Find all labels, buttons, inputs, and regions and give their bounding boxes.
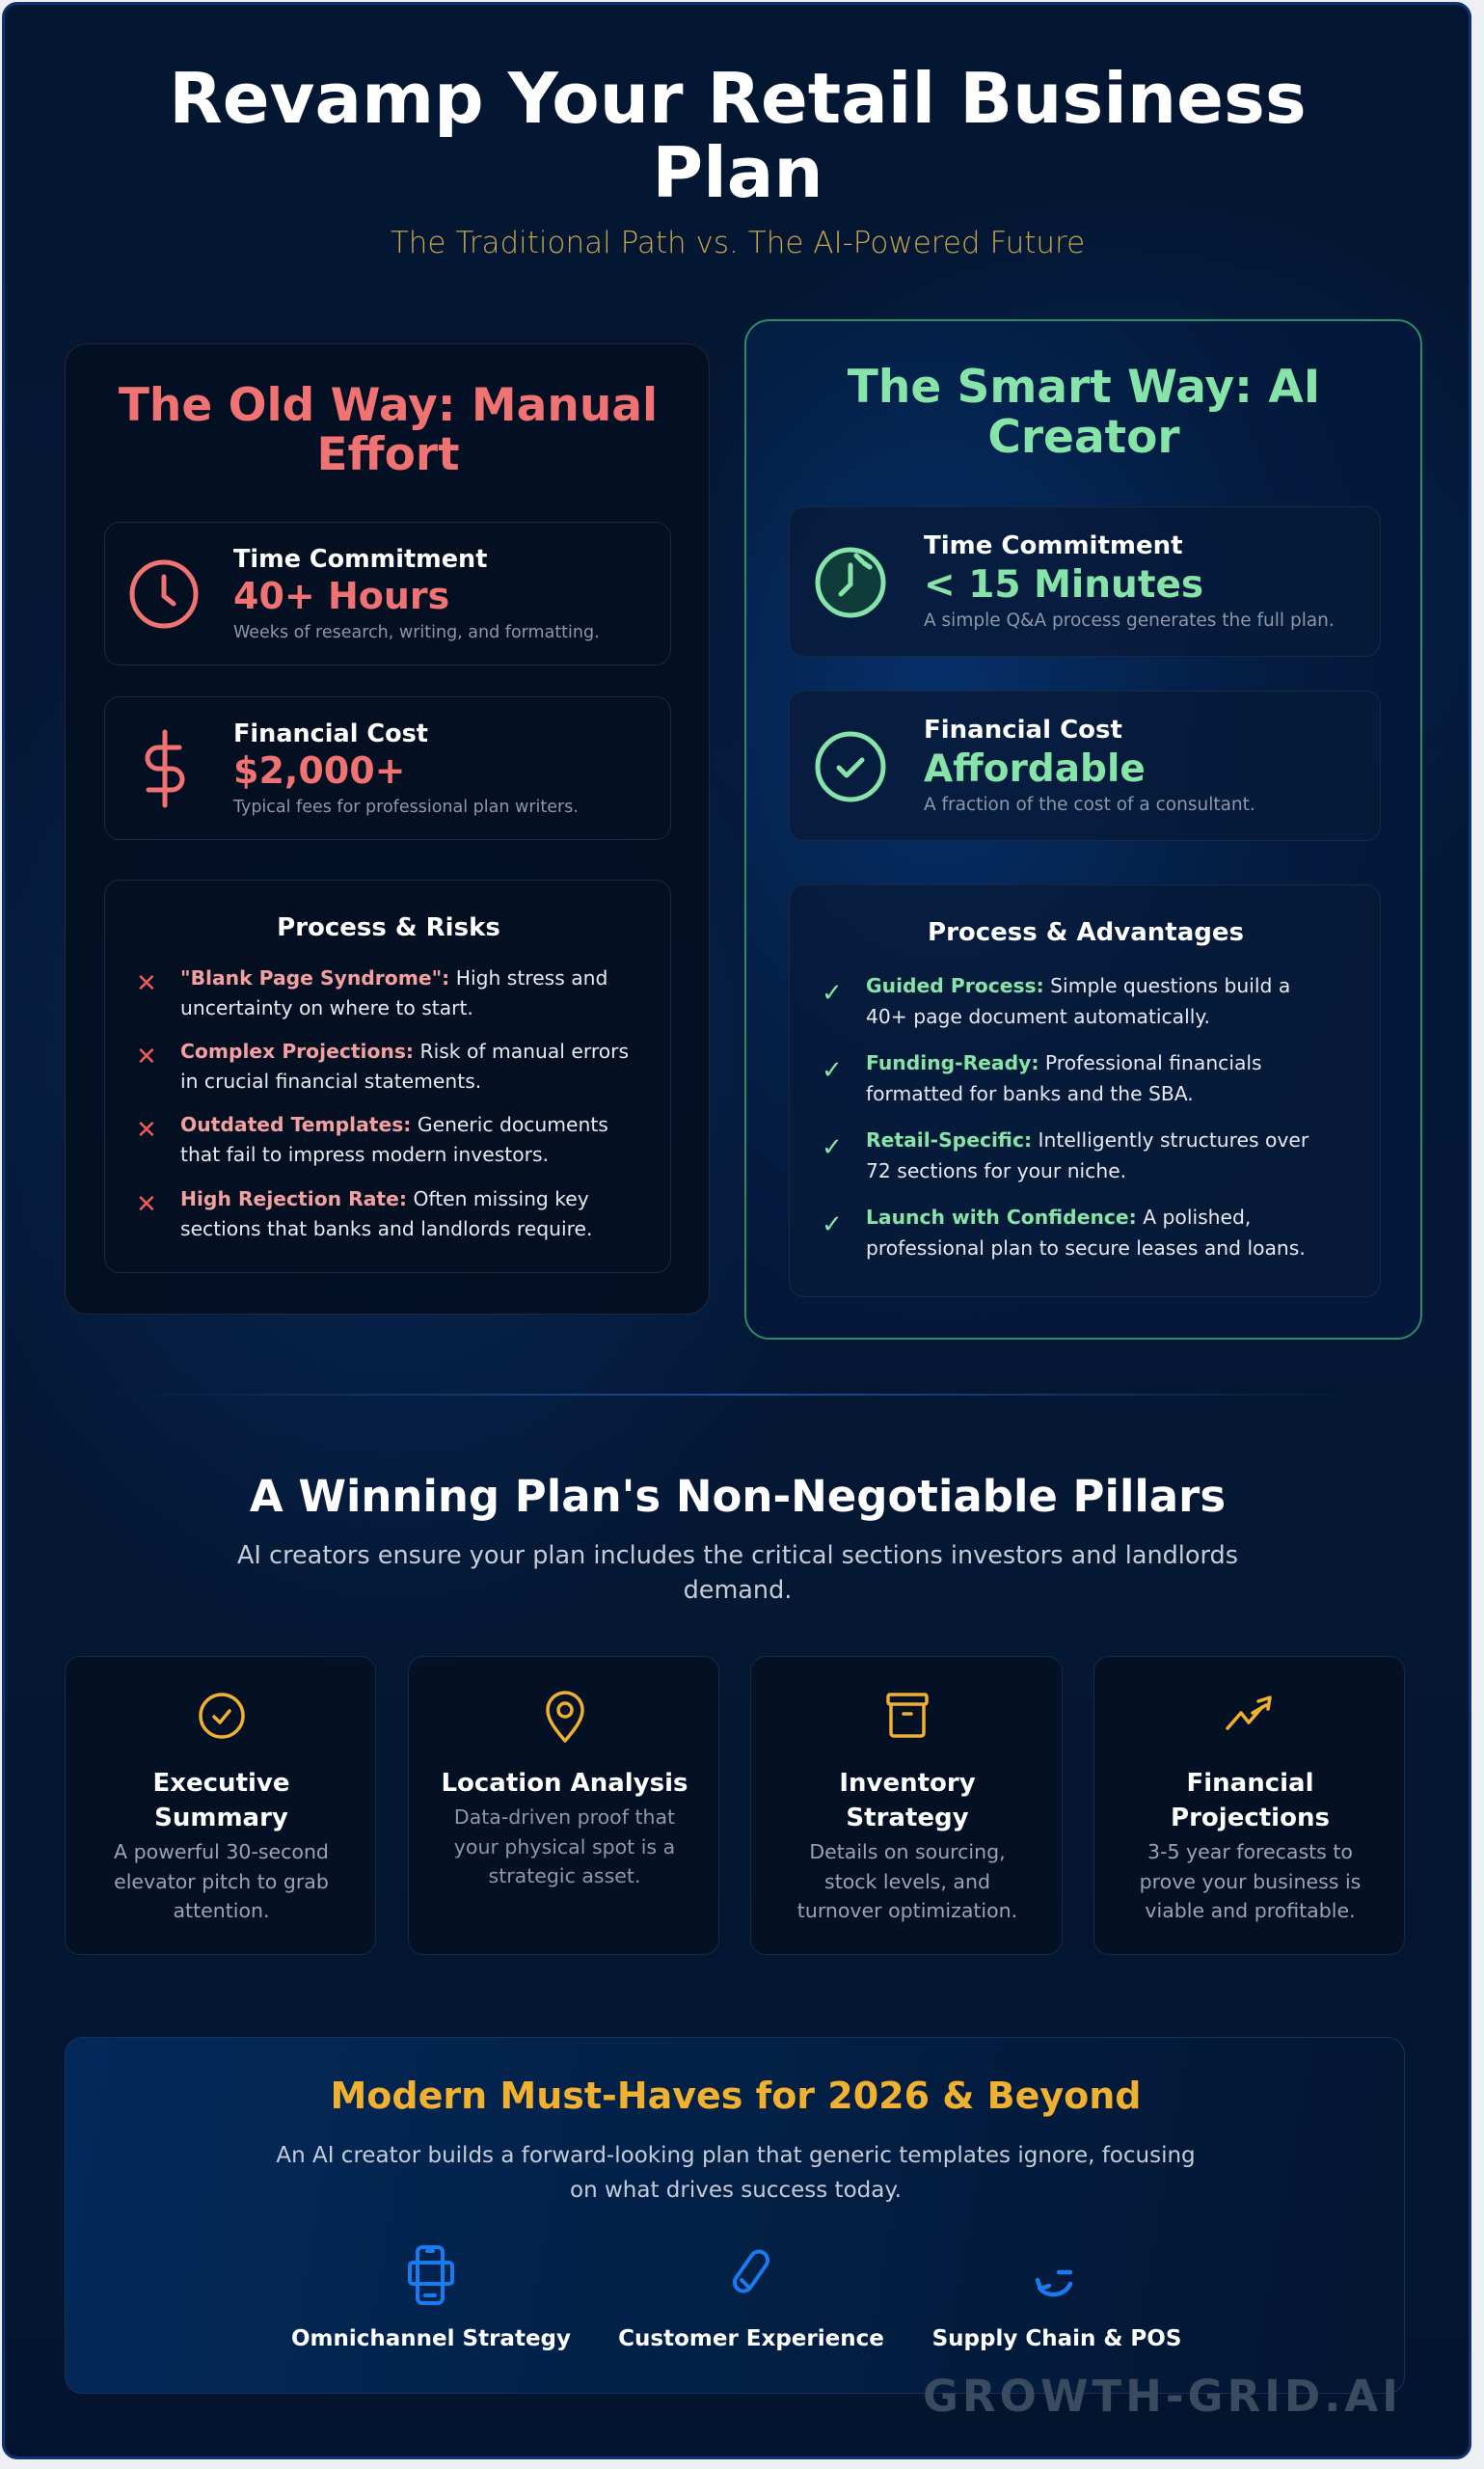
icon: dollar: [145, 729, 185, 808]
item: funding ready: [822, 1051, 1262, 1105]
pillar: executive summary: [65, 1656, 376, 1955]
heading: smart way: The Smart Way: AI: [848, 361, 1320, 414]
item: retail specific: ✓: [822, 1133, 843, 1162]
pillar: inventory strategy: Inventory: [839, 1769, 976, 1798]
card: time commitment smart: [789, 506, 1381, 657]
item: guided process: 40+ page document automatically.: [866, 1005, 1210, 1028]
pillar: location analysis: Location Analysis: [441, 1769, 688, 1798]
card: process & advantages: Process & Advantages: [928, 918, 1244, 947]
title: Revamp Your Retail Business: [169, 58, 1307, 139]
item: blank page: "Blank Page Syndrome": High stress and: [180, 966, 607, 990]
item: funding ready: ✓: [822, 1056, 843, 1085]
card: process & risks: [104, 880, 671, 1273]
item: retail specific: 72 sections for your niche.: [866, 1159, 1126, 1182]
icon: check circle gold: [199, 1693, 245, 1739]
pillar: inventory strategy: stock levels, and: [824, 1869, 990, 1892]
heading: smart way: Creator: [987, 411, 1180, 464]
icon: check circle: [816, 731, 885, 802]
pillar: executive summary: A powerful 30-second: [114, 1840, 329, 1863]
panel: modern must-haves: [65, 2037, 1405, 2394]
icon: pill/link: [733, 2249, 769, 2293]
icon: archive box: [886, 1693, 929, 1738]
card: time commitment old: [104, 522, 671, 665]
card: financial cost old: $2,000+: [233, 749, 405, 792]
item: outdated templates: Outdated Templates: Generic documents: [180, 1113, 608, 1136]
icon: clock: [129, 559, 199, 629]
item: customer experience: Customer Experience: [618, 2326, 884, 2351]
pillar: financial projections: prove your business is: [1140, 1869, 1361, 1892]
pillar: location analysis: Data-driven proof that: [454, 1805, 675, 1829]
item: launch: Launch with Confidence: A polished,: [866, 1206, 1251, 1229]
card: financial cost old: [104, 696, 671, 840]
pillar: location analysis: [408, 1656, 719, 1955]
pillar: inventory strategy: turnover optimization.: [797, 1899, 1017, 1922]
subtitle: The Traditional Path vs. The AI-Powered Future: [391, 226, 1085, 260]
icon: timer: [816, 548, 885, 617]
icon: trending up: [1226, 1696, 1272, 1730]
heading: old way: Effort: [316, 428, 460, 481]
heading: modern must-haves: Modern Must-Haves for 2026 & Beyond: [330, 2075, 1142, 2117]
pillar: inventory strategy: Strategy: [846, 1804, 969, 1832]
card: time commitment old: 40+ Hours: [233, 575, 449, 617]
item: retail specific: [822, 1128, 1309, 1182]
icon: phone/printer: [408, 2245, 454, 2305]
pillar: financial projections: Projections: [1171, 1804, 1330, 1832]
watermark: GROWTH-GRID.AI: [923, 2371, 1402, 2422]
section heading: pillars: A Winning Plan's Non-Negotiable Pillars: [250, 1471, 1226, 1522]
item: blank page: [136, 966, 607, 1019]
card: financial cost smart: A fraction of the cost of a consultant.: [924, 795, 1255, 815]
card: time commitment smart: < 15 Minutes: [924, 563, 1203, 607]
card: time commitment smart: Time Commitment: [924, 531, 1183, 560]
pillar: inventory strategy: Details on sourcing,: [809, 1840, 1006, 1863]
item: outdated templates: [136, 1113, 608, 1166]
section subtext: demand.: [684, 1576, 792, 1605]
item: funding ready: Funding-Ready: Professional financials: [866, 1051, 1262, 1074]
card: financial cost old: Financial Cost: [233, 719, 428, 748]
card: time commitment old: Time Commitment: [233, 545, 487, 574]
card: financial cost smart: Financial Cost: [924, 716, 1122, 745]
item: omnichannel: Omnichannel Strategy: [291, 2326, 571, 2351]
pillar: executive summary: attention.: [173, 1899, 270, 1922]
card: financial cost smart: [789, 691, 1381, 841]
text: must-haves description: on what drives success today.: [570, 2178, 902, 2203]
item: complex projections: [136, 1040, 629, 1093]
item: guided process: Guided Process: Simple questions build a: [866, 974, 1290, 997]
item: high rejection: High Rejection Rate: Often missing key: [180, 1187, 589, 1210]
item: customer experience: [618, 2249, 884, 2351]
item: complex projections: in crucial financial statements.: [180, 1070, 481, 1093]
item: complex projections: Complex Projections: Risk of manual errors: [180, 1040, 629, 1063]
item: launch: professional plan to secure leases and loans.: [866, 1236, 1306, 1260]
item: omnichannel: [291, 2245, 571, 2351]
text: must-haves description: [276, 2143, 1196, 2203]
card: financial cost smart: Affordable: [924, 747, 1146, 791]
text: must-haves description: An AI creator builds a forward-looking plan that generic templates ignore, focusing: [276, 2143, 1196, 2168]
item: supply chain: Supply Chain & POS: [932, 2326, 1181, 2351]
pillar: executive summary: Summary: [154, 1804, 288, 1832]
item: high rejection: ✕: [136, 1190, 157, 1219]
card: financial cost old: Typical fees for professional plan writers.: [233, 798, 579, 817]
title: Plan: [652, 132, 823, 213]
pillar: financial projections: [1093, 1656, 1405, 1955]
item: supply chain: [932, 2270, 1181, 2351]
pillar: financial projections: Financial: [1186, 1769, 1314, 1798]
heading: smart way: [847, 361, 1320, 464]
card: time commitment smart: A simple Q&A process generates the full plan.: [924, 610, 1335, 631]
icon: refresh arrow: [1036, 2270, 1072, 2297]
section subtext: [237, 1541, 1238, 1605]
icon: map pin: [546, 1691, 584, 1743]
item: guided process: [822, 974, 1290, 1028]
heading: old way: The Old Way: Manual: [119, 379, 658, 432]
item: launch: ✓: [822, 1210, 843, 1239]
panel: smart way: [744, 319, 1422, 1340]
heading: old way: [119, 379, 658, 481]
item: blank page: uncertainty on where to start.: [180, 996, 473, 1019]
pillar: executive summary: elevator pitch to grab: [114, 1869, 329, 1892]
item: outdated templates: ✕: [136, 1116, 157, 1145]
panel: old way: [65, 343, 710, 1315]
pillar: location analysis: strategic asset.: [489, 1864, 640, 1887]
section subtext: AI creators ensure your plan includes the critical sections investors and landlords: [237, 1541, 1238, 1570]
title: [169, 58, 1307, 213]
item: outdated templates: that fail to impress modern investors.: [180, 1143, 549, 1166]
pillar: financial projections: viable and profitable.: [1145, 1899, 1356, 1922]
card: process & advantages: [789, 884, 1381, 1297]
pillar: inventory strategy: [750, 1656, 1063, 1955]
item: retail specific: Retail-Specific: Intelligently structures over: [866, 1128, 1309, 1152]
item: complex projections: ✕: [136, 1043, 157, 1072]
pillar: location analysis: your physical spot is a: [454, 1834, 675, 1858]
item: blank page: ✕: [136, 969, 157, 998]
item: high rejection: [136, 1187, 592, 1240]
item: guided process: ✓: [822, 979, 843, 1008]
card: process & risks: Process & Risks: [277, 913, 500, 942]
pillar: executive summary: Executive: [152, 1769, 289, 1798]
pillar: financial projections: 3-5 year forecasts to: [1147, 1840, 1353, 1863]
card: time commitment old: Weeks of research, writing, and formatting.: [233, 623, 600, 642]
item: funding ready: formatted for banks and the SBA.: [866, 1082, 1194, 1105]
item: launch: [822, 1206, 1306, 1260]
item: high rejection: sections that banks and landlords require.: [180, 1217, 592, 1240]
